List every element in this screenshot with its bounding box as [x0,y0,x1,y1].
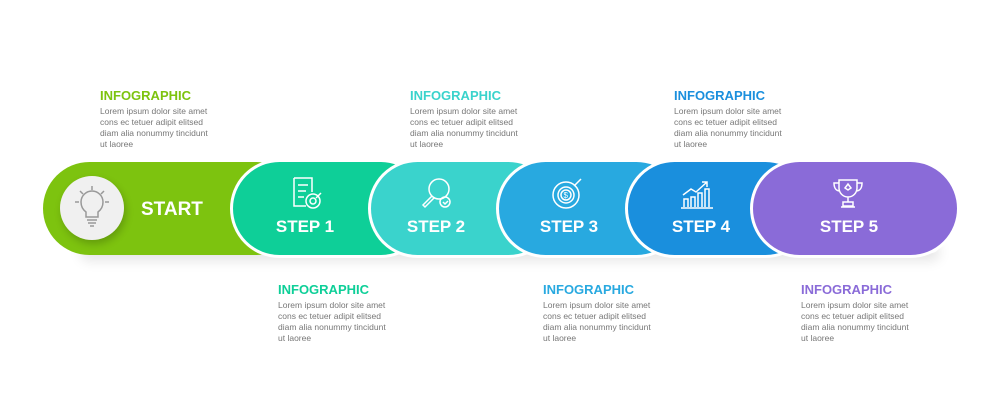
text: step 5: Lorem ipsum dolor site amet cons ec tetuer adipit elitsed diam alia nonummy tincidunt ut laoree [801,300,909,343]
text: step 3: INFOGRAPHIC [543,282,634,297]
icon: checklist [293,177,322,209]
text: start: Lorem ipsum dolor site amet cons ec tetuer adipit elitsed diam alia nonummy tincidunt ut laoree [100,106,208,149]
text: step 2: Lorem ipsum dolor site amet cons ec tetuer adipit elitsed diam alia nonummy tincidunt ut laoree [410,106,518,149]
text: start: INFOGRAPHIC [100,88,191,103]
label: step 3: STEP 3 [540,217,598,236]
pill: step 5 [750,159,960,258]
icon: magnifier [422,178,451,208]
pill: step 4 [625,159,815,258]
text: step 4: Lorem ipsum dolor site amet cons ec tetuer adipit elitsed diam alia nonummy tincidunt ut laoree [674,106,782,149]
pill: step 2 [368,159,558,258]
icon: lightbulb [60,176,124,240]
label: step 4: STEP 4 [672,217,730,236]
text: step 1: INFOGRAPHIC [278,282,369,297]
text: step 3: Lorem ipsum dolor site amet cons ec tetuer adipit elitsed diam alia nonummy tincidunt ut laoree [543,300,651,343]
icon: dollar target: $ [564,191,568,200]
icon: trophy [833,179,863,208]
label: step 2: STEP 2 [407,217,465,236]
label: start: START [141,199,203,220]
text: step 4: INFOGRAPHIC [674,88,765,103]
text: step 2: INFOGRAPHIC [410,88,501,103]
pill: start [43,162,303,255]
label: step 5: STEP 5 [820,217,878,236]
icon: growth chart [681,181,713,209]
pill: step 3 [496,159,686,258]
icon: dollar target [552,178,582,209]
text: step 1: Lorem ipsum dolor site amet cons ec tetuer adipit elitsed diam alia nonummy tincidunt ut laoree [278,300,386,343]
text: step 5: INFOGRAPHIC [801,282,892,297]
pill: step 1 [230,159,430,258]
label: step 1: STEP 1 [276,217,334,236]
shadow [80,235,940,253]
